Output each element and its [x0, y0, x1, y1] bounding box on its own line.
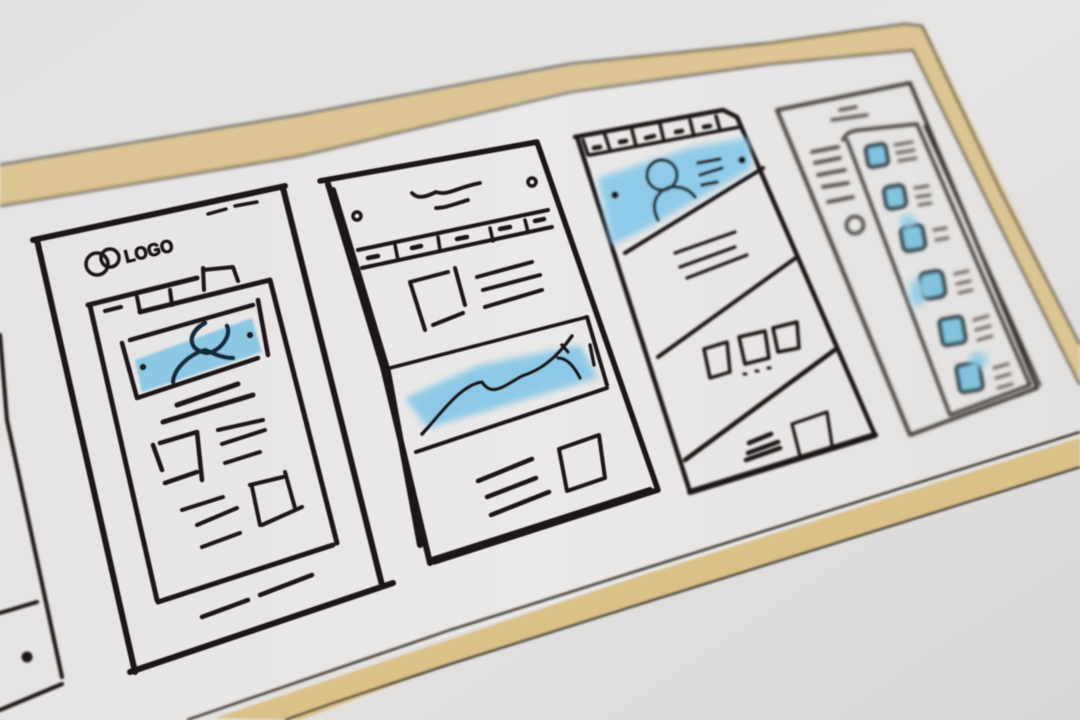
- nav bar: [358, 210, 552, 268]
- section line: [390, 317, 587, 368]
- inner screen: [88, 278, 337, 602]
- gold band: bottom: [187, 432, 1080, 720]
- text lines: [478, 459, 549, 515]
- list items: [865, 143, 983, 393]
- image square: [410, 268, 465, 330]
- top lines: [208, 202, 257, 214]
- wireframe 3: angled sections page: [575, 110, 875, 492]
- blue smudges: [900, 215, 987, 368]
- image square: [559, 435, 605, 491]
- wireframe 1: mobile page with logo: [33, 186, 393, 672]
- wireframe 4: tall page with list: [777, 83, 1040, 435]
- header wordmark: [412, 183, 480, 208]
- text lines: [163, 384, 253, 422]
- text lines: [477, 262, 542, 307]
- nav bar: [583, 116, 740, 155]
- dots: [744, 368, 770, 374]
- logo: [86, 235, 175, 275]
- list text: [895, 142, 1012, 388]
- sidebar lines: [812, 147, 853, 202]
- tab dash: [105, 307, 121, 311]
- icons: dots: [353, 178, 536, 220]
- image square: [250, 472, 302, 525]
- icon: circle: [846, 216, 864, 234]
- page outline: [575, 110, 875, 492]
- page outline: [33, 186, 393, 672]
- wireframe 2: page with hero landscape: [320, 142, 658, 563]
- footer lines and square: [746, 434, 780, 460]
- thick left and bottom strokes: [328, 184, 650, 563]
- footer lines: [202, 575, 312, 617]
- tabs: [137, 267, 238, 312]
- inner list panel: [843, 124, 1030, 415]
- wireframe fragment at left edge: [0, 335, 62, 710]
- page outline: [777, 83, 1037, 435]
- icon: dot: [24, 654, 30, 660]
- header lines: [832, 107, 867, 120]
- blue hero with user icon: [598, 138, 763, 253]
- three squares: [704, 322, 799, 378]
- text lines: [675, 232, 747, 278]
- image square: [153, 432, 202, 483]
- blue image block: [122, 300, 268, 398]
- hero section: [405, 317, 607, 452]
- page outline: [320, 142, 658, 562]
- logo: LOGO: [122, 235, 175, 267]
- gold band: top and right: [0, 24, 1080, 385]
- text lines: [218, 420, 265, 463]
